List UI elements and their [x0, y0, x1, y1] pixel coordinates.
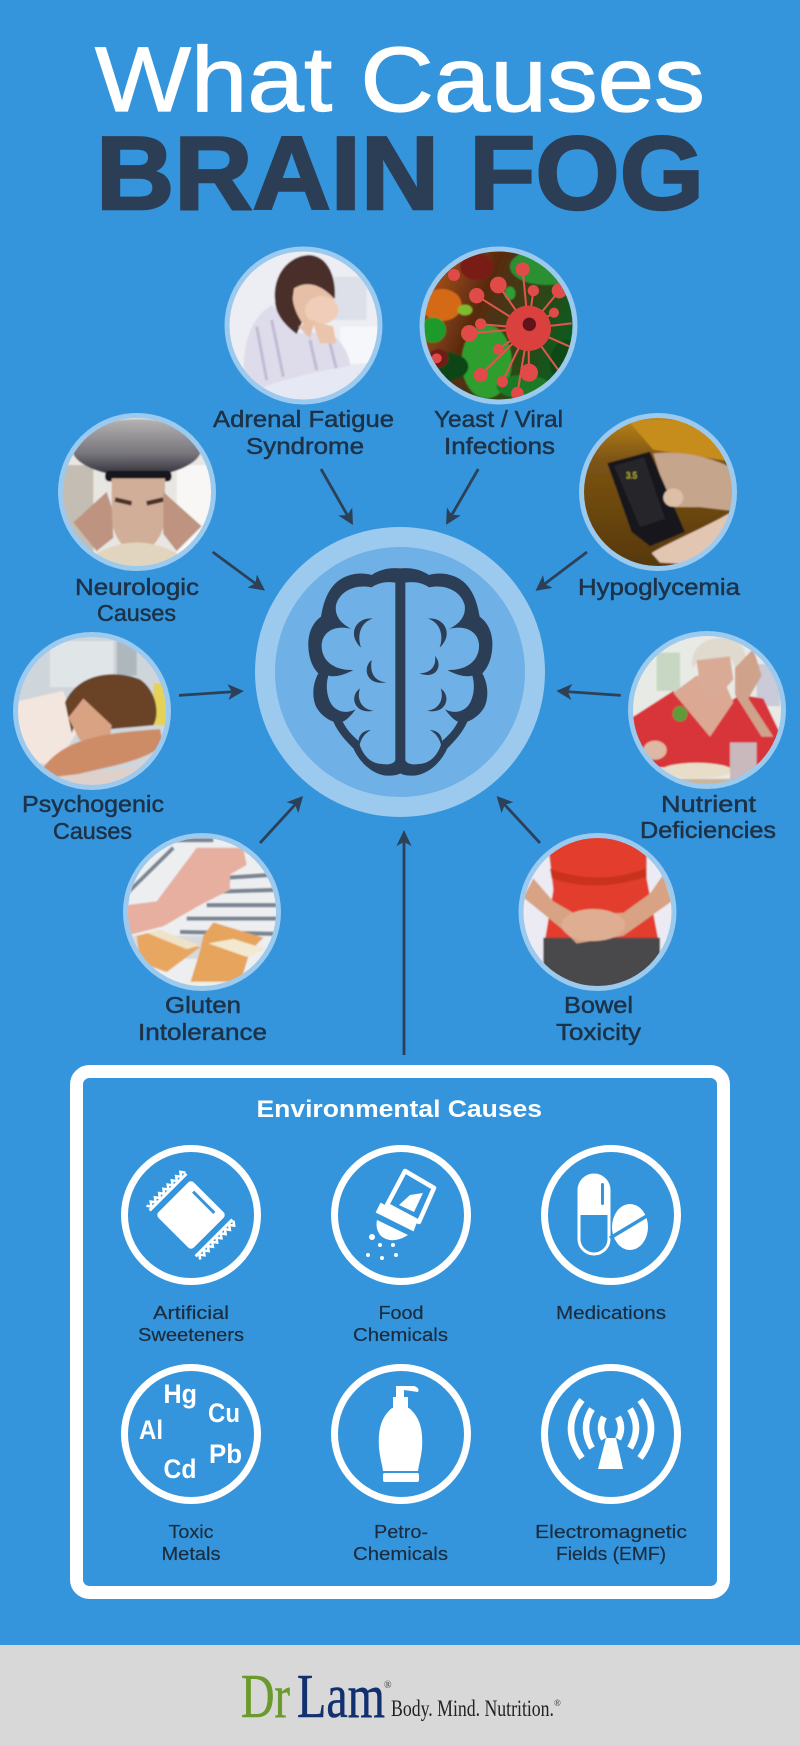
label: food chemicals: Food	[378, 1303, 424, 1323]
icon: toxic metals: Cu	[208, 1398, 240, 1428]
photo: hypoglycemia: 3.5	[626, 470, 637, 481]
label: psychogenic: Psychogenic	[22, 791, 164, 817]
photo: gluten intolerance	[120, 832, 283, 993]
label: yeast / viral: Infections	[444, 433, 555, 459]
label: electromagnetic fields: Electromagnetic	[535, 1522, 687, 1542]
label: gluten intolerance: Intolerance	[138, 1019, 267, 1045]
logo: Dr Lam: ®	[554, 1698, 561, 1708]
label: bowel toxicity: Toxicity	[556, 1019, 642, 1045]
title	[95, 29, 705, 232]
arrow: adrenal to brain	[314, 465, 360, 529]
photo: hypoglycemia	[577, 411, 740, 572]
icon: artificial sweeteners	[124, 1148, 258, 1282]
label: bowel toxicity: Bowel	[564, 992, 633, 1018]
label: artificial sweeteners: Sweeteners	[138, 1325, 244, 1345]
title: What Causes	[95, 29, 705, 131]
icon: toxic metals: Hg	[164, 1379, 197, 1409]
label: neurologic: Causes	[97, 600, 176, 626]
label: nutrient deficiencies	[640, 791, 776, 843]
footer band	[0, 1645, 800, 1745]
label: neurologic: Neurologic	[75, 574, 199, 600]
label: bowel toxicity	[556, 992, 642, 1045]
icon: toxic metals: Cd	[164, 1454, 196, 1484]
label: toxic metals: Toxic	[168, 1522, 214, 1542]
arrow: hypoglycemia to brain	[531, 546, 592, 597]
label: food chemicals	[353, 1303, 448, 1345]
icon: food chemicals	[334, 1148, 468, 1282]
photo: bowel toxicity	[517, 832, 680, 993]
photo: psychogenic causes	[10, 632, 173, 794]
label: yeast / viral	[434, 406, 563, 459]
logo: Dr Lam: ®	[384, 1680, 392, 1691]
label: adrenal fatigue: Syndrome	[246, 433, 364, 459]
label: neurologic	[75, 574, 199, 626]
logo: Dr Lam: Body. Mind. Nutrition.	[391, 1696, 554, 1721]
logo: Dr Lam: Dr	[241, 1663, 290, 1731]
label: toxic metals: Metals	[162, 1544, 220, 1564]
label: artificial sweeteners: Artificial	[153, 1303, 229, 1323]
label: psychogenic: Causes	[53, 818, 132, 844]
arrow: nutrient to brain	[556, 683, 621, 703]
panel heading: Environmental Causes	[256, 1096, 542, 1123]
label: yeast / viral: Yeast / Viral	[434, 406, 563, 432]
photo: adrenal fatigue	[223, 246, 383, 407]
label: medications: Medications	[556, 1303, 666, 1323]
label: electromagnetic fields: Fields (EMF)	[556, 1544, 666, 1564]
central brain medallion	[255, 527, 545, 817]
photo: nutrient deficiencies	[627, 631, 790, 794]
label: psychogenic	[22, 791, 164, 844]
label: electromagnetic fields	[535, 1522, 687, 1564]
label: hypoglycemia: Hypoglycemia	[578, 574, 740, 600]
label: gluten intolerance	[138, 992, 267, 1045]
label: toxic metals	[162, 1522, 220, 1564]
label: artificial sweeteners	[138, 1303, 244, 1345]
photo: yeast / viral infections	[417, 246, 583, 407]
label: nutrient deficiencies: Deficiencies	[640, 817, 776, 843]
label: adrenal fatigue: Adrenal Fatigue	[213, 406, 394, 432]
arrow: environmental to brain	[396, 830, 412, 1055]
label: adrenal fatigue	[213, 406, 394, 459]
label: petro-chemicals	[353, 1522, 448, 1564]
title: BRAIN FOG	[96, 116, 704, 232]
panel: environmental causes	[76, 1072, 724, 1592]
arrow: gluten to brain	[254, 791, 309, 848]
arrow: psychogenic to brain	[178, 683, 244, 703]
arrow: yeast to brain	[439, 465, 485, 529]
label: petro-chemicals: Chemicals	[353, 1544, 448, 1564]
logo: Dr Lam: Lam	[297, 1663, 385, 1731]
logo: Dr Lam	[241, 1663, 561, 1731]
arrow: bowel to brain	[491, 791, 546, 848]
icon: toxic metals	[124, 1368, 258, 1500]
icon: toxic metals: Al	[139, 1415, 163, 1445]
photo: neurologic causes	[53, 411, 220, 572]
label: food chemicals: Chemicals	[353, 1325, 448, 1345]
label: petro-chemicals: Petro-	[374, 1522, 428, 1542]
icon: toxic metals: Pb	[209, 1439, 242, 1469]
icon: electromagnetic fields	[544, 1368, 678, 1500]
icon: petro-chemicals	[334, 1368, 468, 1500]
label: gluten intolerance: Gluten	[165, 992, 241, 1018]
icon: medications	[544, 1148, 678, 1282]
label: nutrient deficiencies: Nutrient	[661, 791, 757, 817]
arrow: neurologic to brain	[208, 546, 270, 597]
